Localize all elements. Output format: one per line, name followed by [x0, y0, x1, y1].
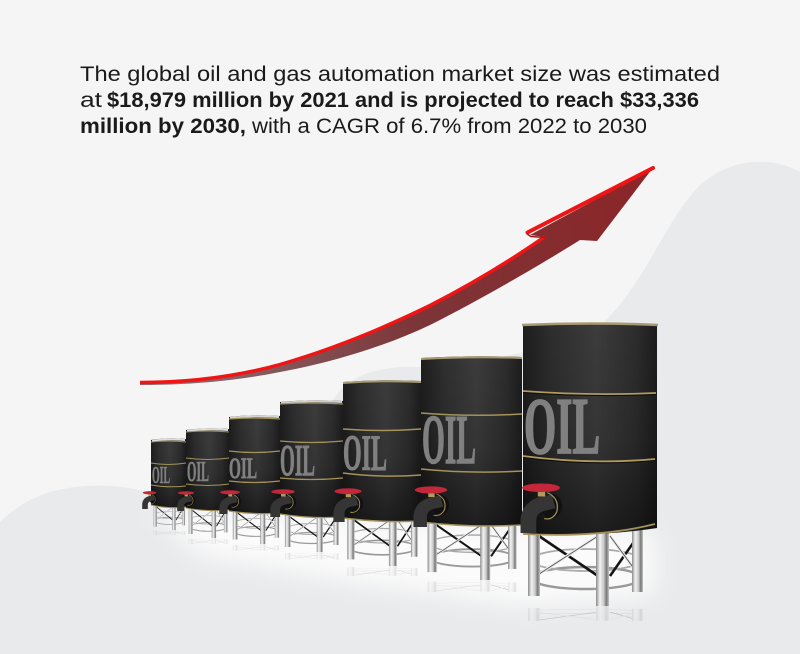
barrel 4: OIL [280, 436, 315, 485]
floor glow under the barrels [150, 505, 655, 606]
barrel 7: OIL [524, 383, 600, 471]
barrel 1 [143, 438, 186, 530]
barrel 3: OIL [229, 452, 257, 485]
title text [80, 62, 720, 138]
background hills [0, 162, 800, 654]
title text: $18,979 million by 2021 and is projected to reach $33,336 [107, 88, 699, 112]
barrel 5: OIL [343, 426, 387, 482]
title text: with a CAGR of 6.7% from 2022 to 2030 [251, 114, 647, 138]
stand reflections [154, 530, 643, 621]
barrel 6 [415, 356, 522, 580]
barrel 4 [271, 400, 343, 552]
barrel 1: OIL [152, 463, 170, 489]
title text: The global oil and gas automation market size was estimated [80, 62, 720, 86]
barrel 2: OIL [187, 456, 209, 488]
barrel 7 [522, 324, 658, 606]
growth arrow [140, 168, 653, 385]
barrel 2 [178, 428, 229, 538]
title text: million by 2030, [80, 114, 246, 138]
oil barrels [143, 324, 658, 606]
barrel 6: OIL [422, 402, 476, 479]
barrel 5 [334, 380, 421, 566]
barrel 3 [220, 415, 280, 544]
title text: at [80, 88, 102, 112]
